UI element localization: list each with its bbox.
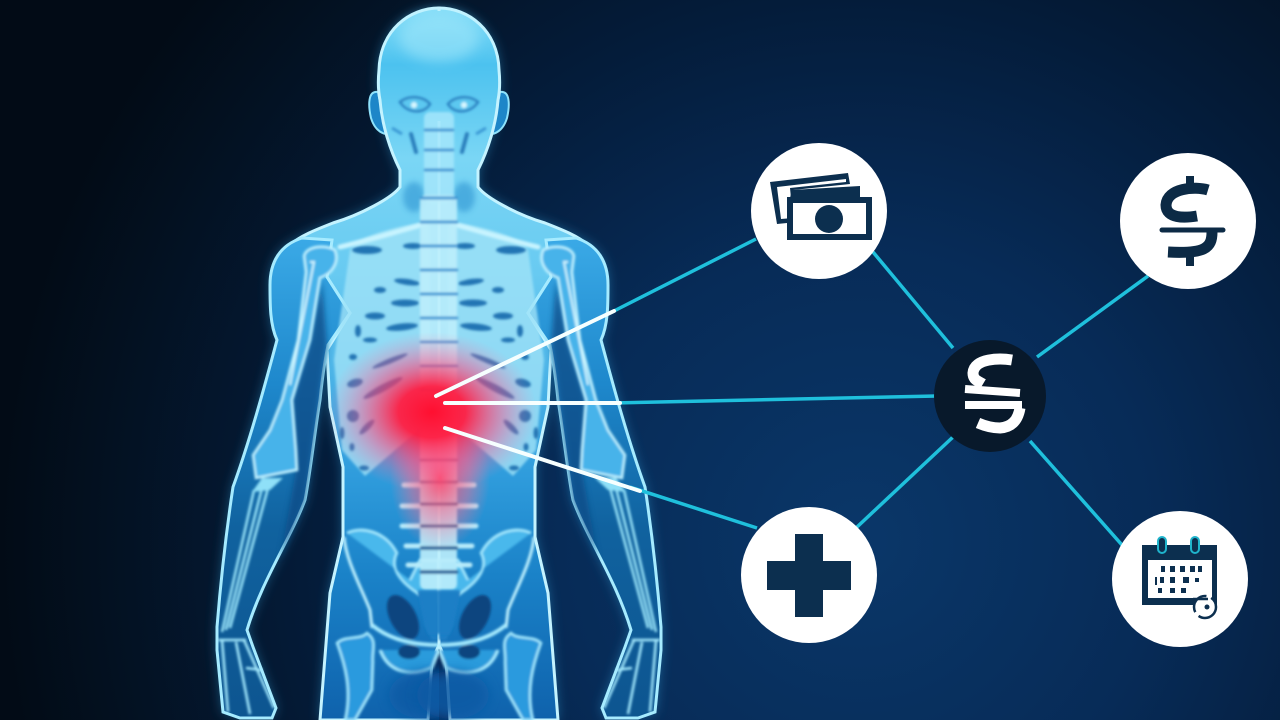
line: body to cash icon: [612, 239, 756, 312]
line: medical icon to node: [857, 437, 953, 527]
line: cash icon to node: [873, 252, 953, 348]
beam: lower: [445, 428, 640, 491]
icon: calendar: [1112, 511, 1248, 647]
icon: cash stack: [751, 143, 887, 279]
spine: [402, 112, 476, 590]
beam: middle: [445, 401, 620, 405]
line: body to centre node: [612, 396, 937, 403]
line: node to calendar icon: [1030, 441, 1122, 545]
head centre fill hides seam: [436, 11, 442, 121]
line: node to dollar icon: [1037, 276, 1148, 357]
line: body to medical icon: [630, 487, 757, 528]
sacrum: [418, 590, 460, 634]
red pain glow: [327, 332, 537, 550]
figure: x-ray human body: [217, 8, 661, 720]
icon: medical cross: [741, 507, 877, 643]
connector lines: [612, 239, 1148, 545]
icon: central dollar node: [934, 340, 1046, 452]
white beams from pain point: [436, 311, 640, 491]
head highlight: [399, 14, 479, 62]
icon: dollar sign: [1120, 153, 1256, 289]
beam: upper: [436, 311, 614, 396]
